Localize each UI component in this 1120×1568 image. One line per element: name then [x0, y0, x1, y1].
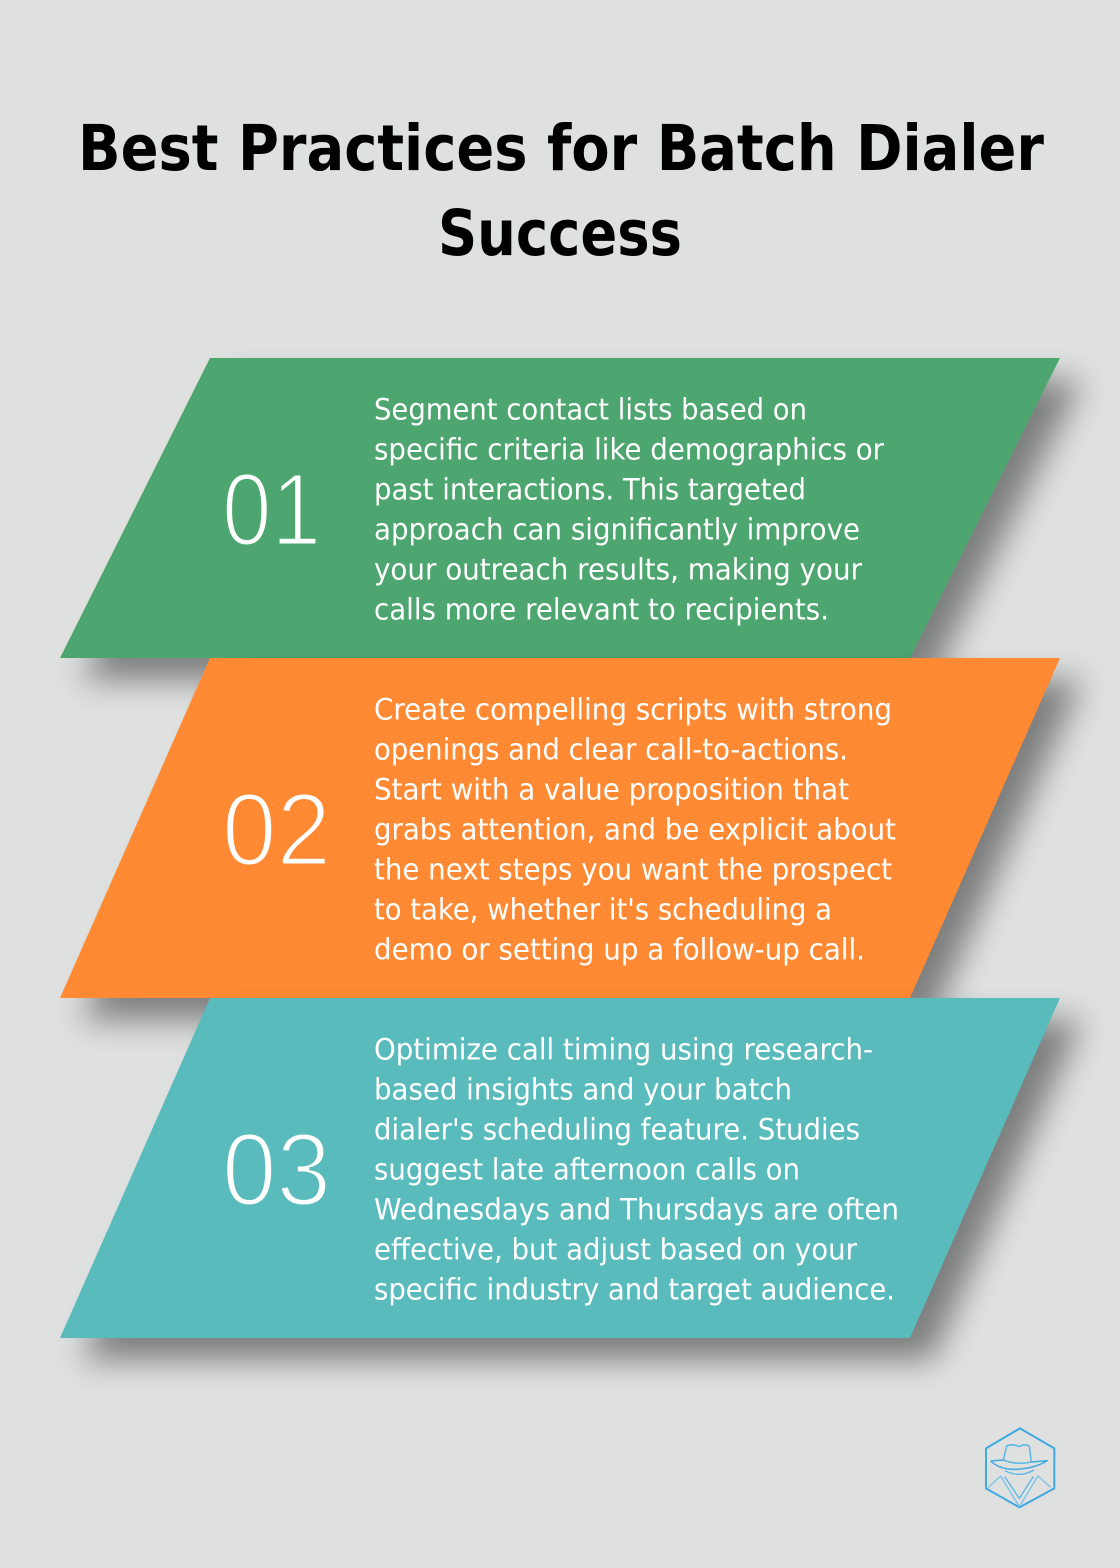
title: [78, 112, 1044, 270]
number 03: 03: [222, 1112, 331, 1227]
icon: spy logo: [986, 1428, 1054, 1507]
panel: step 01: [60, 358, 1082, 680]
text: step 03: suggest late afternoon calls on: [374, 1152, 800, 1186]
text: step 01: [374, 392, 884, 626]
text: step 03: Optimize call timing using research-: [374, 1032, 873, 1066]
text: step 01: calls more relevant to recipients.: [374, 592, 829, 626]
text: step 01: Segment contact lists based on: [374, 392, 807, 426]
text: step 01: past interactions. This targeted: [374, 472, 806, 506]
text: step 01: approach can significantly improve: [374, 512, 860, 546]
text: step 01: your outreach results, making your: [374, 552, 862, 586]
text: step 02: Start with a value proposition that: [374, 772, 849, 806]
text: step 02: demo or setting up a follow-up call.: [374, 932, 865, 966]
text: step 02: openings and clear call-to-actions.: [374, 732, 848, 766]
number 02: 02: [222, 772, 331, 887]
text: step 02: grabs attention, and be explicit about: [374, 812, 896, 846]
text: step 02: [374, 692, 896, 966]
panel: step 03: [60, 998, 1082, 1360]
text: step 03: dialer's scheduling feature. Studies: [374, 1112, 860, 1146]
text: step 03: based insights and your batch: [374, 1072, 792, 1106]
number 01: 01: [222, 452, 321, 567]
title: Success: [438, 197, 682, 270]
text: step 03: specific industry and target audience.: [374, 1272, 895, 1306]
text: step 03: effective, but adjust based on your: [374, 1232, 857, 1266]
panel: step 02: [60, 658, 1082, 1020]
text: step 03: [374, 1032, 899, 1306]
text: step 03: Wednesdays and Thursdays are often: [374, 1192, 899, 1226]
text: step 02: Create compelling scripts with strong: [374, 692, 892, 726]
text: step 01: specific criteria like demographics or: [374, 432, 884, 466]
text: step 02: the next steps you want the prospect: [374, 852, 892, 886]
text: step 02: to take, whether it's scheduling a: [374, 892, 832, 926]
